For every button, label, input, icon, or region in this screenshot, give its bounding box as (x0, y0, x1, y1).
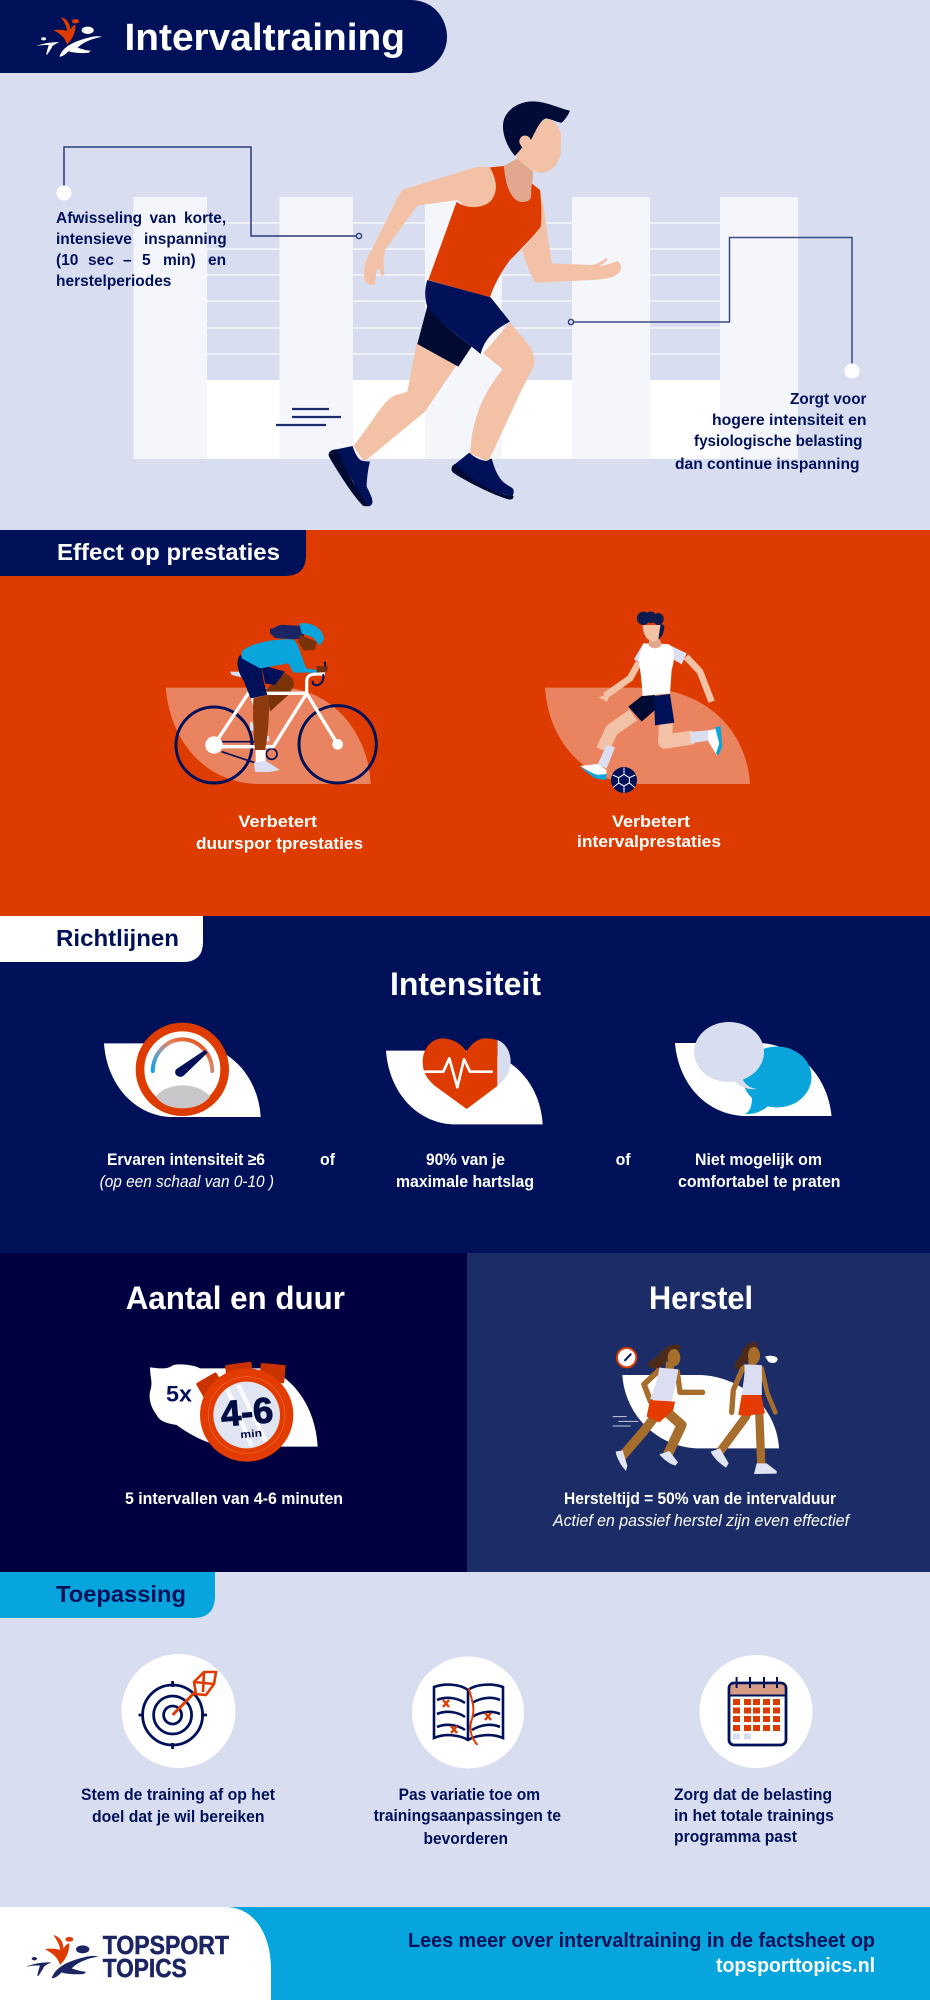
text: pas variatie toe: Pas variatie toe om (399, 1786, 540, 1804)
icon: stopwatch: 5x (166, 1382, 193, 1407)
icon: training book (412, 1656, 524, 1768)
text: factsheet link: topsporttopics.nl (716, 1955, 875, 1977)
icon: cyclist (166, 623, 376, 784)
text: of 2: of (616, 1151, 631, 1169)
text: pas variatie toe: bevorderen (424, 1830, 508, 1848)
text block: left callout: inspanning (144, 231, 227, 248)
text block: left callout: intensieve (56, 231, 132, 248)
text block: right callout: hogere intensiteit en (712, 412, 866, 429)
text: ervaren intensiteit: Ervaren intensiteit ≥6 (107, 1151, 265, 1169)
panel: hero (0, 0, 930, 530)
text: zorg dat de belasting: Zorg dat de belasting (674, 1786, 832, 1804)
text: zorg dat de belasting: in het totale trainings (674, 1807, 834, 1825)
text: hersteltijd: Hersteltijd = 50% van de intervalduur (564, 1490, 837, 1508)
text block: right callout: Zorgt voor (790, 391, 866, 408)
text: niet mogelijk (678, 1151, 840, 1191)
heading tab: effect op prestaties: Effect op prestaties (57, 539, 280, 565)
title bar (0, 0, 447, 73)
callout line left (56, 147, 362, 239)
text block: left callout: min) (163, 252, 196, 269)
footer logo: TOPSPORT (103, 1932, 229, 1960)
heading tab: richtlijnen (0, 916, 203, 962)
panel: richtlijnen intensiteit (0, 916, 930, 1253)
text: verbetert duursportprestaties: duurspor tprestaties (196, 834, 363, 853)
heading tab: toepassing (0, 1572, 215, 1618)
text block: left callout: – (123, 252, 132, 269)
text: niet mogelijk: comfortabel te praten (678, 1173, 840, 1191)
text block: right callout: dan continue inspanning (675, 456, 860, 473)
text block: right callout (675, 391, 866, 473)
text: ervaren intensiteit (100, 1151, 274, 1191)
text: of 1: of (320, 1151, 335, 1169)
icon: stopwatch: 4-6 (219, 1389, 275, 1435)
icon: runner (329, 101, 621, 506)
icon: calendar (700, 1655, 812, 1768)
text: zorg dat de belasting: programma past (674, 1828, 797, 1846)
icon: stopwatch: min (240, 1427, 263, 1441)
footer logo: TOPICS (103, 1955, 187, 1983)
text: verbetert intervalprestaties: intervalprestaties (577, 832, 721, 851)
callout line right (568, 238, 860, 378)
text: stem de training af (81, 1786, 275, 1826)
icon: heart (386, 1038, 543, 1124)
heading tab: toepassing: Toepassing (56, 1581, 186, 1607)
text: verbetert duursportprestaties: Verbetert (238, 812, 317, 831)
text: actief en passief: Actief en passief herstel zijn even effectief (552, 1512, 851, 1530)
text: maximale hartslag: maximale hartslag (396, 1173, 534, 1191)
motion lines (276, 409, 341, 425)
text block: left callout: herstelperiodes (56, 273, 171, 290)
heading tab: effect op prestaties (0, 530, 306, 576)
title: Intervaltraining (124, 17, 405, 59)
panel: footer (0, 1907, 930, 2000)
heading: intensiteit: Intensiteit (390, 966, 541, 1002)
hero floor and track lines (207, 223, 720, 459)
heading tab: richtlijnen: Richtlijnen (56, 925, 179, 951)
text: zorg dat de belasting (674, 1786, 834, 1846)
text: verbetert duursportprestaties (196, 812, 363, 853)
text block: left callout: van (150, 210, 176, 227)
text block: left callout: 5 (142, 252, 151, 269)
text: verbetert intervalprestaties (577, 812, 721, 851)
text: 5 intervallen: 5 intervallen van 4-6 minuten (125, 1490, 343, 1508)
icon: stopwatch (150, 1362, 318, 1462)
panel: aantal en duur (0, 1253, 467, 1572)
icon: recovery runners (613, 1342, 779, 1474)
text block: left callout: Afwisseling (56, 210, 142, 227)
text: factsheet link (408, 1930, 875, 1977)
text block: right callout: fysiologische belasting (694, 433, 862, 450)
heading: aantal en duur: Aantal en duur (126, 1280, 345, 1316)
panel: herstel (467, 1253, 930, 1572)
icon: footballer (545, 612, 750, 793)
interval bars (134, 197, 798, 459)
text: pas variatie toe (374, 1786, 561, 1848)
panel: effect op prestaties (0, 530, 930, 916)
text block: left callout: en (208, 252, 226, 269)
icon: logo mark (26, 1935, 98, 1978)
heading: herstel: Herstel (649, 1280, 753, 1316)
text: stem de training af: doel dat je wil bereiken (92, 1808, 264, 1826)
text: verbetert intervalprestaties: Verbetert (612, 812, 690, 831)
text: maximale hartslag (396, 1151, 534, 1191)
icon: target (122, 1654, 236, 1768)
icon: gauge (104, 1027, 261, 1117)
text: maximale hartslag: 90% van je (426, 1151, 505, 1169)
footer logo (26, 1932, 229, 1983)
text: ervaren intensiteit: (op een schaal van 0-10 ) (100, 1173, 274, 1191)
text block: left callout: sec (88, 252, 114, 269)
text: niet mogelijk: Niet mogelijk om (695, 1151, 822, 1169)
icon: logo mark (36, 17, 102, 57)
icon: speech bubbles (675, 1022, 832, 1116)
text: pas variatie toe: trainingsaanpassingen te (374, 1807, 561, 1825)
text: stem de training af: Stem de training af op het (81, 1786, 275, 1804)
panel: toepassing (0, 1572, 930, 1907)
text block: left callout: (10 (56, 252, 78, 269)
text: factsheet link: Lees meer over intervaltraining in de factsheet op (408, 1930, 875, 1952)
text block: left callout: korte, (184, 210, 226, 227)
